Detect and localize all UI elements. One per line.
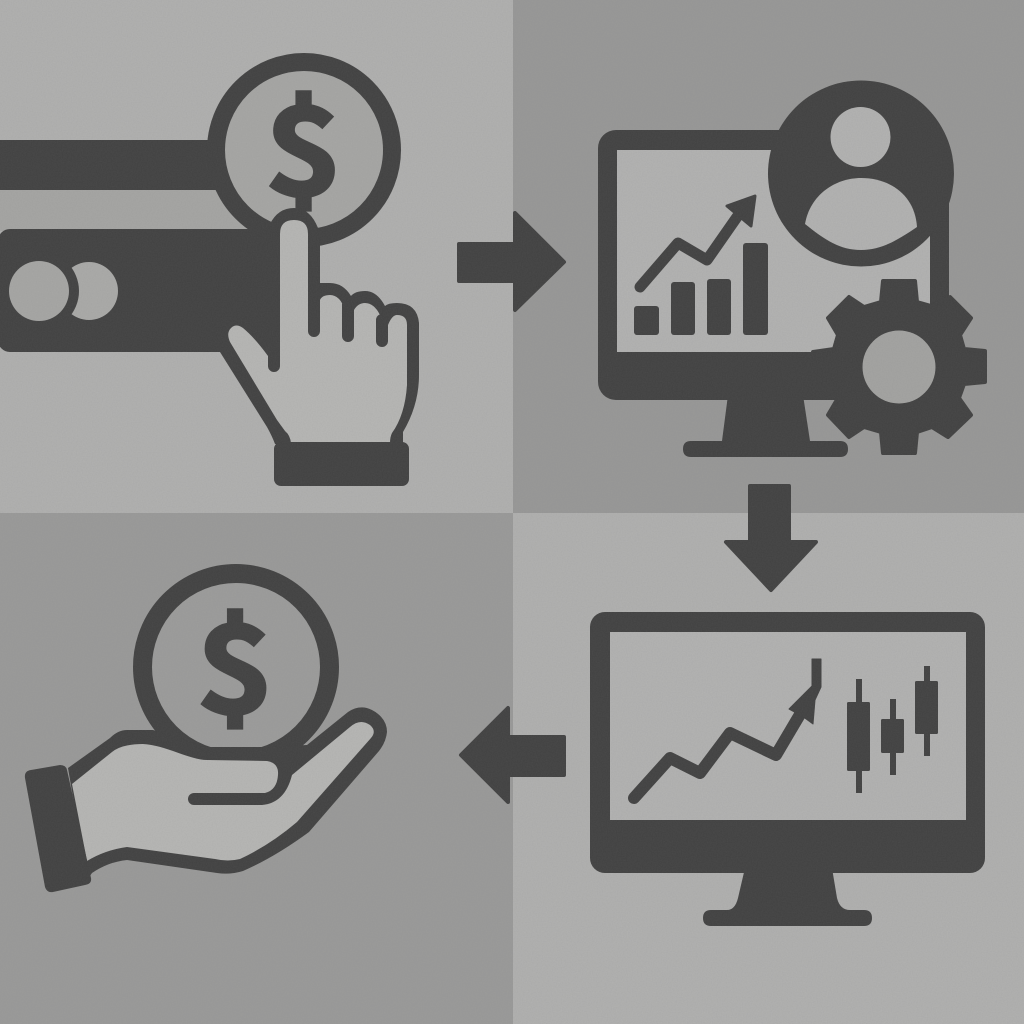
card body	[0, 229, 280, 352]
card top stripe	[0, 140, 230, 190]
icon: monitor with chart, user and gear	[598, 80, 985, 457]
trend line	[634, 659, 821, 798]
monitor	[598, 130, 949, 400]
monitor frame	[590, 612, 985, 873]
icon: credit card payment with pointing hand	[0, 54, 419, 486]
cuff	[274, 442, 409, 486]
panel: bottom-right background	[513, 513, 1024, 1024]
pointing hand	[220, 208, 419, 444]
coin with dollar: $	[196, 572, 274, 749]
arrow: down	[726, 486, 816, 590]
hand	[68, 707, 387, 880]
cuff	[25, 765, 91, 892]
bars	[634, 243, 768, 335]
candlesticks	[847, 666, 938, 793]
panel: bottom-left background	[0, 513, 513, 1024]
panel: top-left background	[0, 0, 513, 513]
card shadow band	[0, 189, 250, 231]
stand	[703, 868, 872, 926]
coin with dollar	[142, 572, 330, 760]
arrow: left	[461, 708, 564, 802]
icon: monitor with trading chart	[590, 612, 985, 926]
icon: hand holding coin	[25, 572, 387, 892]
card logo circles	[0, 251, 118, 331]
gear	[813, 281, 985, 453]
arrow: right	[459, 213, 564, 310]
trend arrow	[640, 196, 755, 287]
monitor stand	[683, 395, 848, 457]
coin with dollar: $	[265, 54, 342, 231]
user badge	[768, 80, 954, 266]
coin with dollar	[216, 54, 392, 238]
panel: top-right background	[513, 0, 1024, 513]
